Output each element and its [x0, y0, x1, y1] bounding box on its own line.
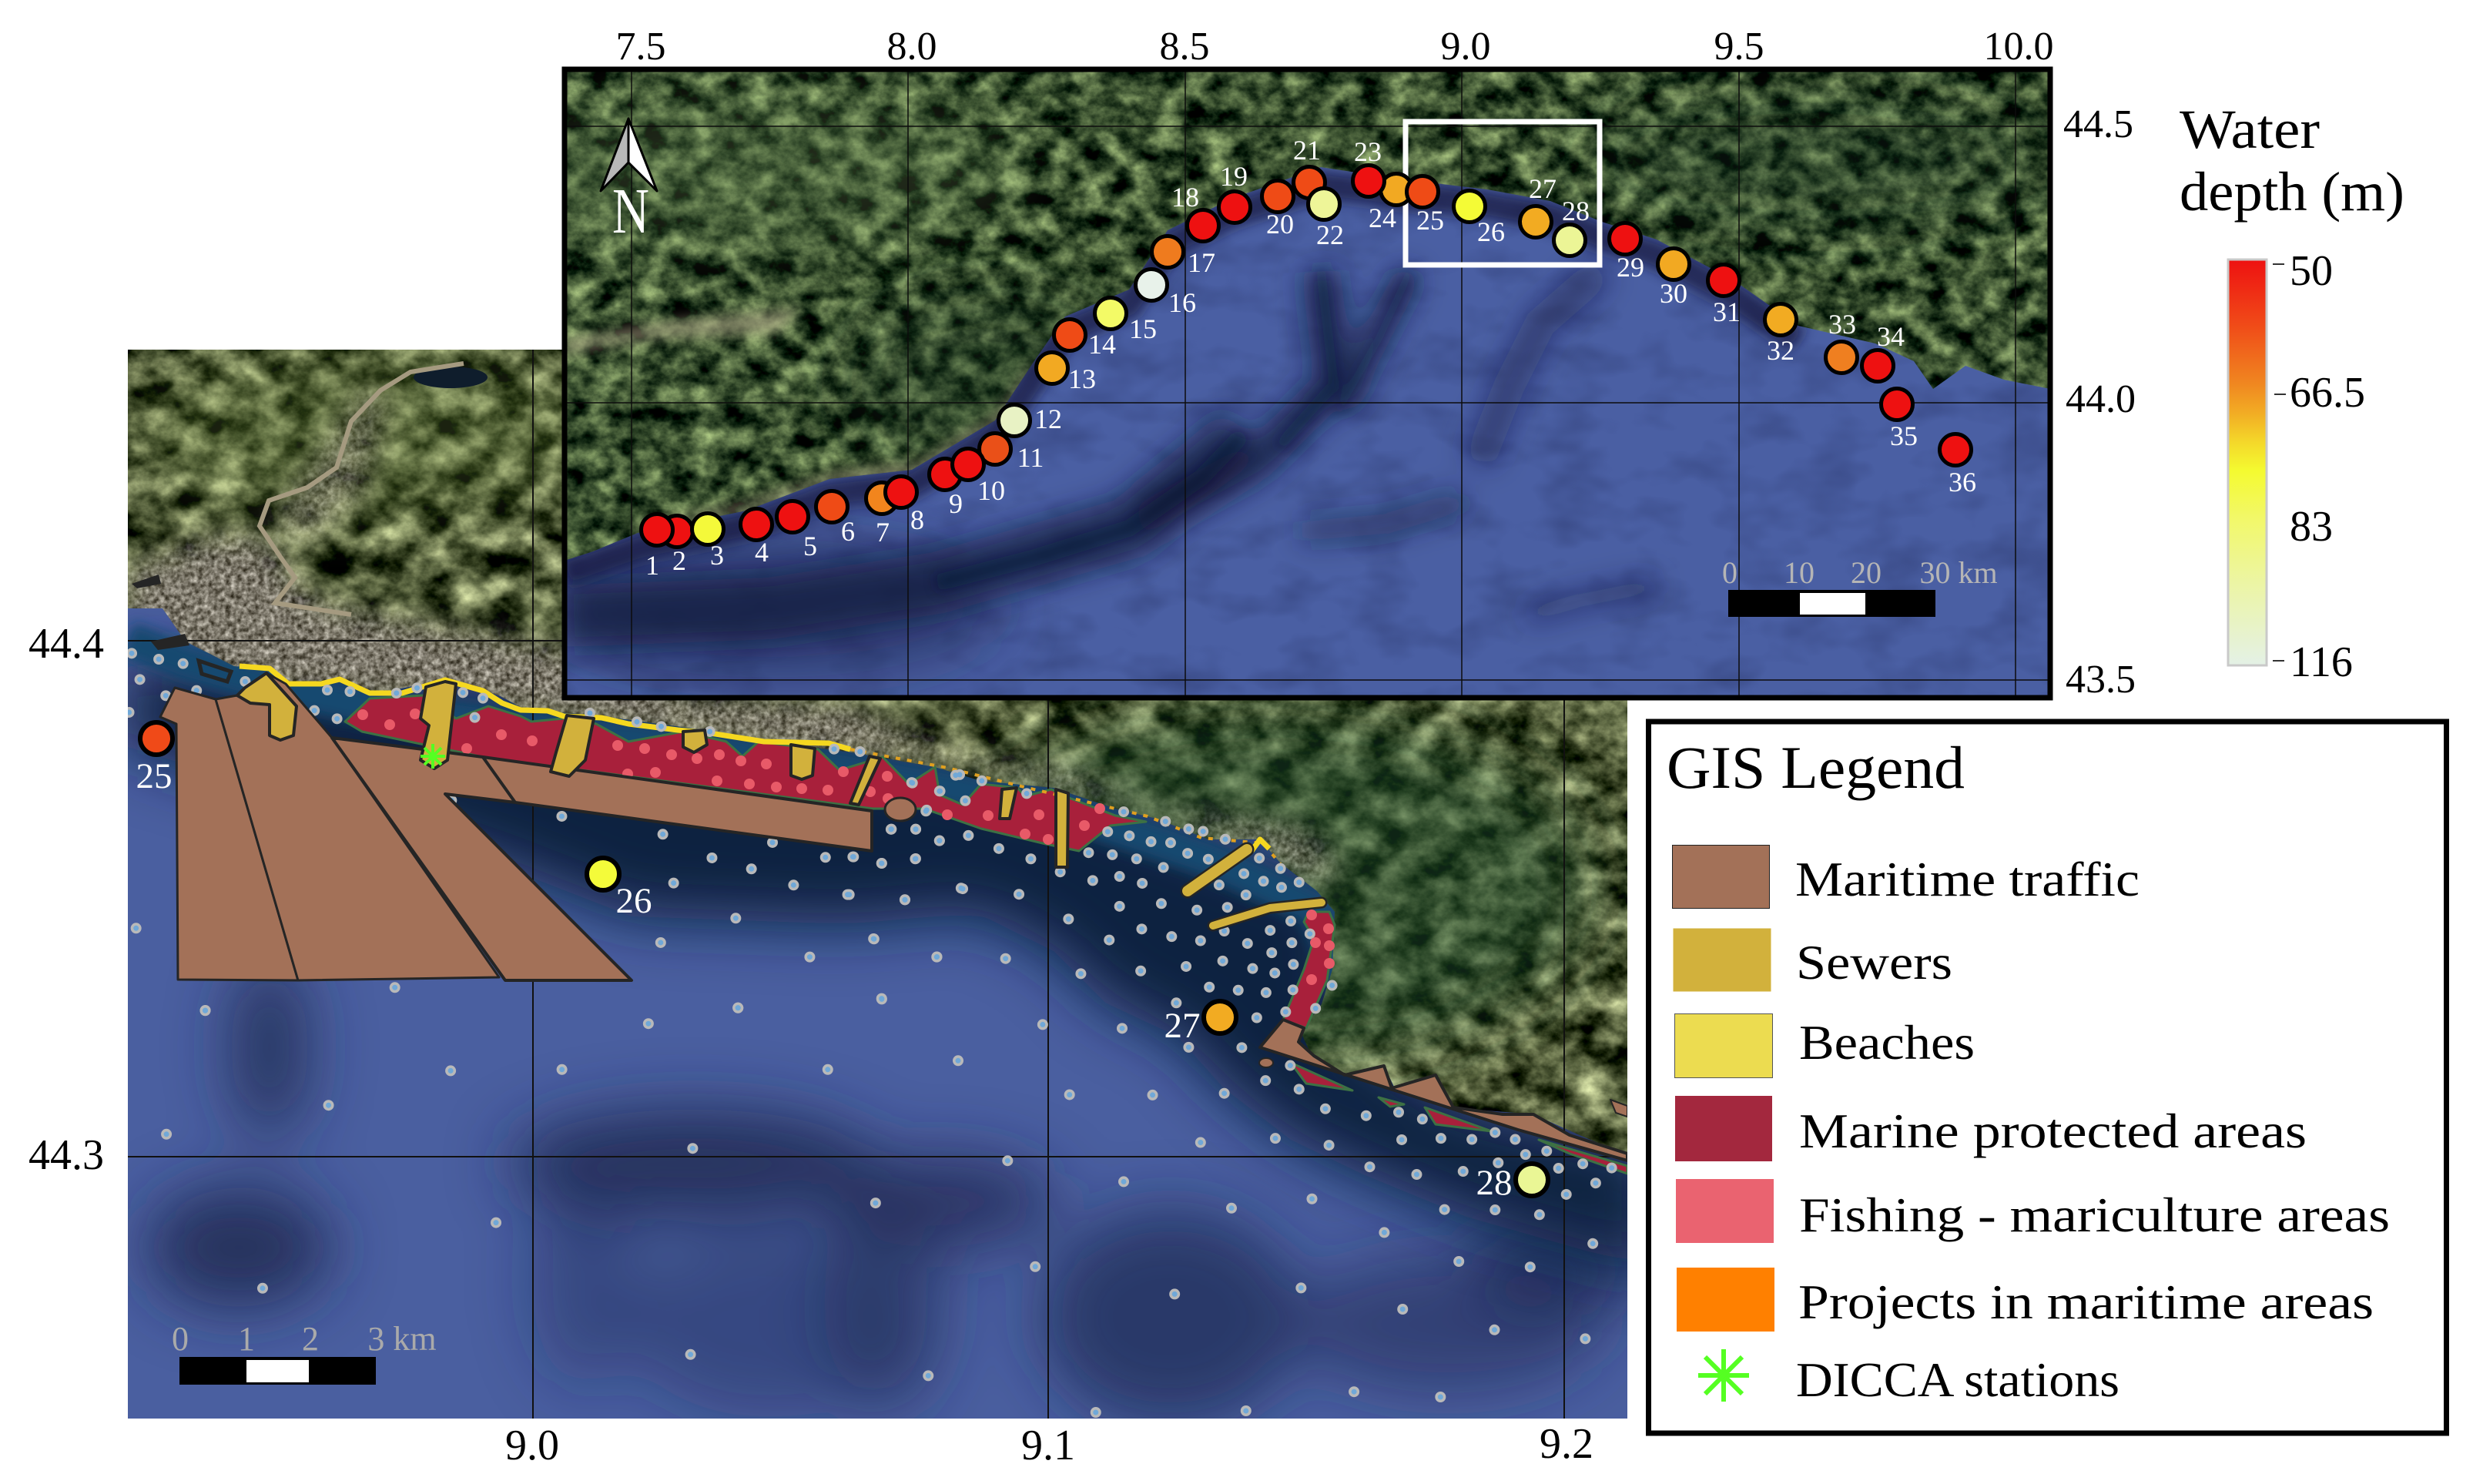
beaches shoreline [240, 666, 1282, 866]
sea base [128, 608, 1627, 1419]
stations 1-36 [641, 165, 1972, 547]
colour scale title: depth (m) [2180, 161, 2404, 223]
station labels 1-36: 2 [672, 545, 686, 576]
station labels 1-36: 30 [1660, 278, 1687, 309]
axis labels: detail map [28, 620, 1593, 1469]
scale bar: 3 km: 3 km [367, 1320, 437, 1358]
panel: detail map of Genoa coast [128, 347, 1656, 1425]
legend frame [1648, 722, 2446, 1433]
axis labels: overview map: 8.5 [1160, 25, 1209, 69]
reservoir and road in valley [260, 363, 488, 615]
marine protected areas [345, 695, 1627, 1174]
axis labels: overview map: 9.5 [1714, 25, 1764, 69]
station labels 1-36: 24 [1369, 203, 1396, 233]
legend item: marine protected areas: Marine protected areas [1799, 1104, 2307, 1158]
coastal shadow [565, 185, 1798, 574]
scale bar: 3 km: 1 [238, 1320, 255, 1358]
station labels 1-36: 5 [803, 531, 817, 561]
dots: blue centres [129, 653, 1612, 1412]
grid lines [565, 69, 2050, 698]
seabed shadows [146, 955, 1640, 1425]
station labels 1-36: 11 [1017, 442, 1044, 473]
colour scale title: Water [2180, 99, 2320, 160]
scale bar: 3 km: 0 [172, 1320, 189, 1358]
colour bar labels: 66.5 [2290, 369, 2365, 417]
scale bar: 3 km: 2 [302, 1320, 319, 1358]
axis labels: overview map: 10.0 [1984, 25, 2053, 69]
axis labels: overview map: 7.5 [616, 25, 665, 69]
shallow coastal water [128, 662, 1656, 1271]
station labels 1-36: 34 [1877, 321, 1905, 352]
colour bar labels [2290, 247, 2365, 686]
icon: north arrow: N [612, 176, 649, 247]
scale bar: 30 km: 0 [1722, 555, 1737, 590]
grid lines [128, 350, 1627, 1419]
icon: DICCA station [421, 744, 445, 769]
fishing-mariculture and monitoring dots [129, 653, 1612, 1412]
axis labels: detail map: 9.2 [1540, 1420, 1593, 1468]
colour scale: water depth [2180, 99, 2404, 686]
stations 25-28 [140, 722, 1548, 1196]
scale bar: 30 km: 30 km [1919, 555, 1998, 590]
axis labels: detail map: 44.4 [28, 620, 104, 668]
station labels 1-36: 36 [1949, 467, 1976, 497]
land imagery [516, 69, 2050, 570]
station labels 1-36: 7 [876, 517, 890, 548]
axis labels: overview map: 43.5 [2066, 658, 2136, 702]
station labels 25-28: 26 [616, 881, 652, 921]
icon: north arrow [601, 119, 657, 247]
dots: grey points with blue centre [129, 653, 1612, 1412]
panel: regional overview map [516, 69, 2050, 698]
seabed noise [565, 69, 2050, 698]
legend item: fishing and mariculture areas: Fishing - mariculture areas [1799, 1188, 2390, 1242]
station labels 1-36: 9 [949, 488, 963, 519]
station labels 1-36: 32 [1767, 335, 1794, 366]
station labels 1-36: 33 [1828, 309, 1856, 340]
station labels 1-36: 29 [1617, 252, 1644, 283]
legend item: maritime traffic: Maritime traffic [1795, 852, 2140, 906]
station labels 25-28: 28 [1476, 1163, 1513, 1203]
panel: GIS legend [1648, 722, 2446, 1433]
station labels 1-36: 17 [1188, 247, 1215, 278]
teal nearshore band [128, 639, 1348, 986]
legend title: GIS Legend [1667, 734, 1965, 801]
legend item: beaches [1674, 1013, 1975, 1078]
station labels 1-36: 3 [710, 540, 724, 571]
axis labels: detail map: 44.3 [28, 1131, 104, 1179]
scale bar: 30 km [1722, 555, 1998, 617]
dots: pink on protected areas [357, 709, 1335, 985]
canyon cores [937, 271, 1410, 583]
colour bar labels: 83 [2290, 503, 2333, 551]
station labels 1-36: 8 [910, 504, 924, 535]
station labels 1-36: 21 [1293, 135, 1321, 166]
station labels 1-36: 18 [1171, 182, 1199, 213]
station labels 25-28 [136, 756, 1513, 1203]
station labels 1-36 [645, 135, 1976, 581]
axis labels: overview map: 9.0 [1440, 25, 1491, 69]
station labels 25-28: 25 [136, 756, 173, 796]
station labels 1-36: 25 [1416, 205, 1444, 236]
scale bar: 3 km [172, 1320, 437, 1385]
deep canyons [565, 270, 1656, 616]
legend item: sewers: Sewers [1796, 935, 1952, 990]
station labels 1-36: 31 [1713, 296, 1741, 327]
station labels 1-36: 12 [1034, 404, 1062, 434]
legend item: projects in maritime areas [1677, 1268, 2374, 1332]
scale bar: 30 km: 20 [1851, 555, 1882, 590]
station labels 1-36: 19 [1220, 161, 1248, 192]
white box: detail map extent [1406, 122, 1600, 265]
legend item: maritime traffic [1673, 846, 2140, 909]
station labels 1-36: 13 [1068, 363, 1096, 394]
harbour water [128, 608, 171, 639]
sewers: outfalls [1188, 849, 1322, 926]
station labels 1-36: 10 [977, 475, 1005, 506]
colour bar labels: 50 [2290, 247, 2333, 295]
legend item: projects in maritime areas: Projects in maritime areas [1798, 1275, 2374, 1329]
station labels 25-28: 27 [1164, 1006, 1200, 1046]
station labels 1-36: 27 [1529, 173, 1557, 204]
scale bar: 30 km: 10 [1784, 555, 1815, 590]
legend item: DICCA stations: DICCA stations [1796, 1352, 2119, 1407]
station labels 1-36: 15 [1129, 313, 1157, 344]
axis labels: overview map: 44.5 [2063, 102, 2133, 146]
axis labels: overview map [616, 25, 2136, 702]
legend item: beaches: Beaches [1799, 1015, 1975, 1070]
colour bar ticks [2273, 264, 2286, 661]
station labels 1-36: 4 [755, 537, 769, 568]
land imagery [128, 347, 1627, 1166]
sea base [565, 69, 2050, 698]
axis labels: detail map: 9.0 [505, 1422, 559, 1469]
station labels 1-36: 1 [645, 550, 659, 581]
legend item: sewers [1673, 929, 1952, 992]
axis labels: detail map: 9.1 [1021, 1422, 1075, 1469]
axis labels: overview map: 8.0 [887, 25, 937, 69]
colour bar labels: 116 [2290, 638, 2353, 686]
lower-left dark slope [539, 539, 1001, 678]
station labels 1-36: 20 [1266, 209, 1294, 240]
sewers [237, 673, 1068, 867]
colour scale title [2180, 99, 2404, 223]
station labels 1-36: 23 [1354, 136, 1382, 167]
station labels 1-36: 26 [1477, 216, 1505, 247]
port structures [132, 575, 231, 682]
maritime traffic lanes [160, 673, 1627, 1161]
axis labels: overview map: 44.0 [2066, 377, 2136, 421]
station labels 1-36: 6 [841, 516, 855, 547]
overview map frame [565, 69, 2050, 698]
station labels 1-36: 35 [1890, 420, 1918, 451]
legend item: marine protected areas [1675, 1096, 2307, 1161]
station labels 1-36: 28 [1562, 196, 1590, 226]
station labels 1-36: 14 [1088, 329, 1116, 360]
colour bar [2228, 260, 2267, 665]
station labels 1-36: 22 [1316, 219, 1344, 250]
station labels 1-36: 16 [1168, 287, 1196, 318]
legend item: fishing and mariculture areas [1676, 1179, 2390, 1243]
